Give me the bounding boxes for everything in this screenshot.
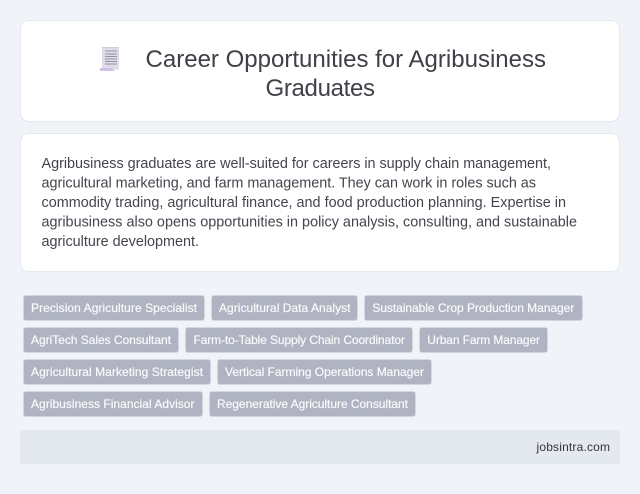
tag: Agricultural Data Analyst: Agricultural Data Analyst	[219, 301, 351, 315]
tag: Sustainable Crop Production Manager: Sustainable Crop Production Manager	[372, 301, 574, 315]
tag: AgriTech Sales Consultant	[24, 328, 178, 352]
tag: Agribusiness Financial Advisor: Agribusiness Financial Advisor	[31, 397, 194, 411]
tag: AgriTech Sales Consultant: AgriTech Sales Consultant	[31, 333, 172, 347]
tag: Vertical Farming Operations Manager	[218, 360, 432, 384]
panel: title header	[20, 20, 620, 122]
tag: Sustainable Crop Production Manager	[364, 296, 582, 320]
tag: Precision Agriculture Specialist: Precision Agriculture Specialist	[31, 301, 198, 315]
tag list	[24, 296, 582, 416]
tag: Precision Agriculture Specialist	[24, 296, 204, 320]
tag: Vertical Farming Operations Manager: Vertical Farming Operations Manager	[225, 365, 424, 379]
tag: Urban Farm Manager	[420, 328, 548, 352]
tag: Farm-to-Table Supply Chain Coordinator	[186, 328, 412, 352]
tag: Regenerative Agriculture Consultant	[210, 392, 416, 416]
footer source text: jobsintra.com	[536, 440, 610, 454]
description text	[42, 156, 577, 250]
tag: Farm-to-Table Supply Chain Coordinator: Farm-to-Table Supply Chain Coordinator	[194, 333, 405, 347]
description text: agriculture development.	[42, 234, 199, 250]
description text: Agribusiness graduates are well-suited for careers in supply chain management,	[42, 156, 551, 172]
description text: agricultural marketing, and farm management. They can work in roles such as	[42, 176, 536, 192]
tag: Agricultural Marketing Strategist	[24, 360, 210, 384]
footer	[20, 430, 620, 464]
title: Graduates	[266, 75, 375, 102]
description text: commodity trading, agricultural finance, and food production planning. Expertise in	[42, 195, 566, 211]
title	[146, 46, 546, 102]
tag: Agribusiness Financial Advisor	[24, 392, 202, 416]
tag: Agricultural Data Analyst	[212, 296, 358, 320]
tag: Urban Farm Manager: Urban Farm Manager	[427, 333, 540, 347]
icon: paper scroll document	[100, 47, 119, 71]
tag: Regenerative Agriculture Consultant: Regenerative Agriculture Consultant	[217, 397, 409, 411]
tag: Agricultural Marketing Strategist: Agricultural Marketing Strategist	[31, 365, 204, 379]
title: Career Opportunities for Agribusiness	[146, 46, 546, 73]
description text: agribusiness also opens opportunities in policy analysis, consulting, and sustainable	[42, 214, 577, 230]
panel: description	[20, 134, 620, 272]
